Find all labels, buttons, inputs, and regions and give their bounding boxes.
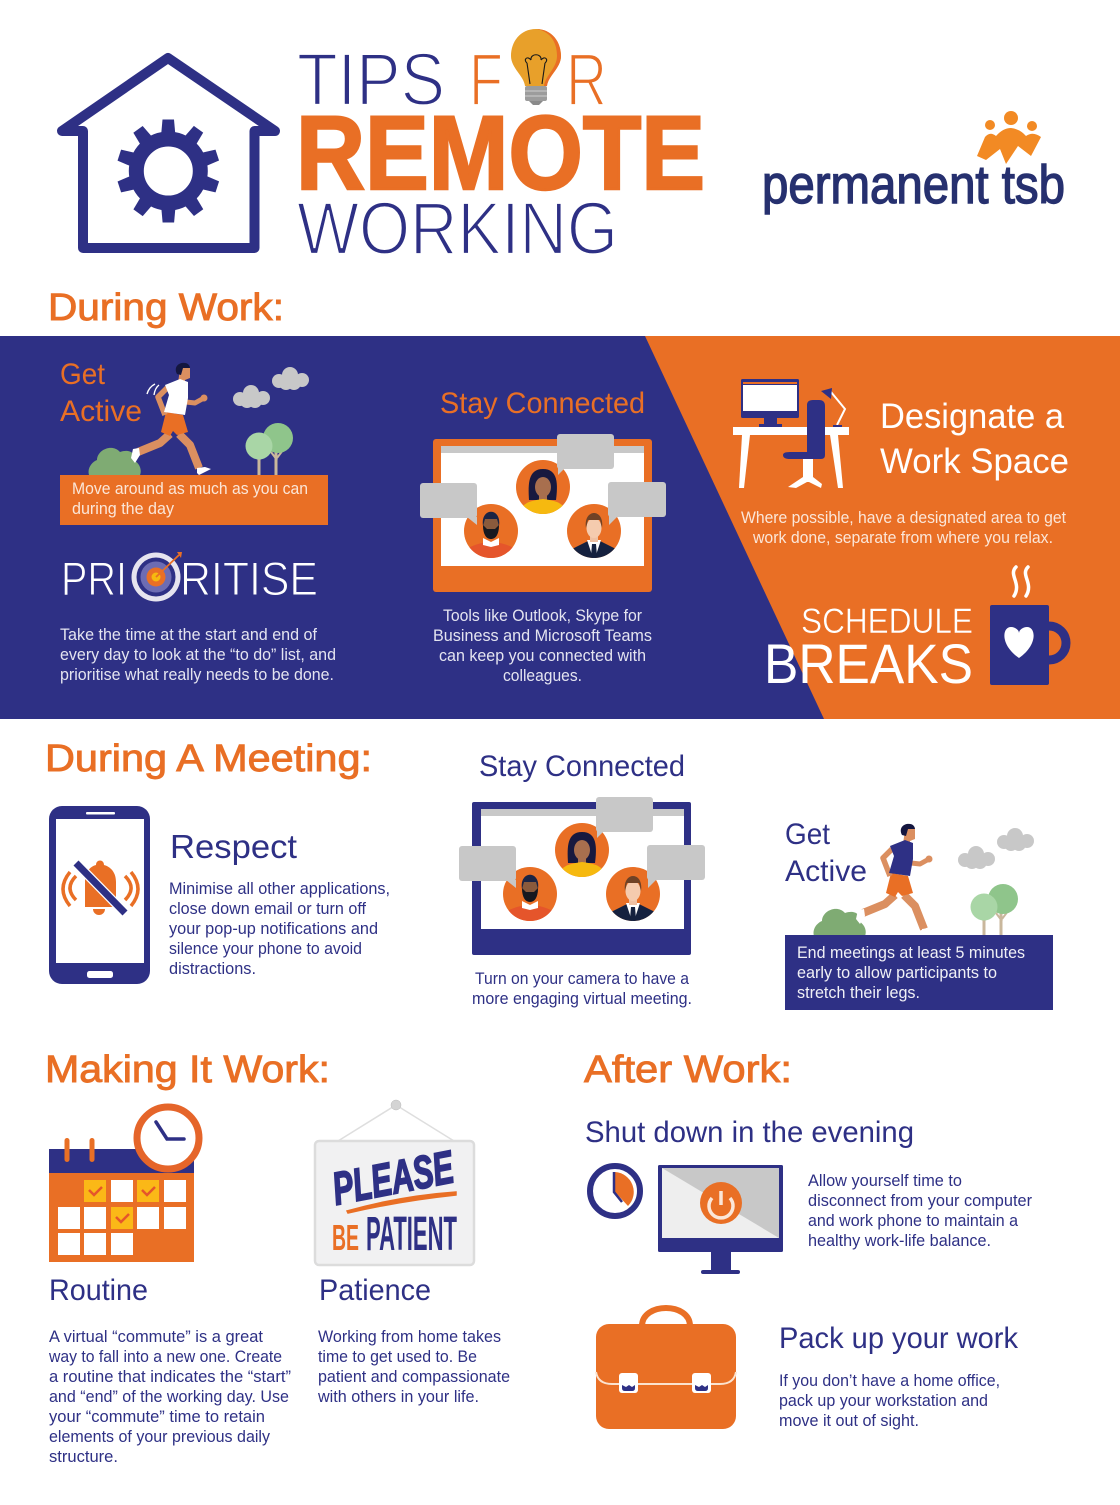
icon: house with gear xyxy=(62,58,275,248)
title line: F: F xyxy=(469,38,503,121)
heading: routine: Routine xyxy=(49,1274,148,1307)
text block: stay connected: colleagues. xyxy=(503,667,582,685)
title line: working: WORKING xyxy=(297,187,618,270)
title line: tips: TIPS xyxy=(297,38,445,121)
text block: designate xyxy=(741,509,1066,547)
heading: get active meeting: Get xyxy=(785,818,831,851)
text block: routine: and “end” of the working day. Use xyxy=(49,1388,289,1406)
logo: permanent tsb xyxy=(762,111,1065,215)
heading: stay connected meeting: Stay Connected xyxy=(479,750,685,783)
icon: silenced phone xyxy=(49,806,150,984)
text block: shut down: Allow yourself time to xyxy=(808,1172,962,1190)
callout: end meetings: End meetings at least 5 minutes xyxy=(797,944,1025,962)
illustration: runner xyxy=(89,363,309,475)
text block: shut down: and work phone to maintain a xyxy=(808,1212,1019,1230)
callout: end meetings: stretch their legs. xyxy=(797,984,920,1002)
heading: designate a work space: Work Space xyxy=(880,442,1069,481)
heading: designate a work space xyxy=(880,397,1069,481)
text block: pack up: pack up your workstation and xyxy=(779,1392,988,1410)
text block: respect: your pop-up notifications and xyxy=(169,920,378,938)
text block: patience: Working from home takes xyxy=(318,1328,501,1346)
text block: routine: way to fall into a new one. Create xyxy=(48,1348,282,1366)
text block: respect: Minimise all other applications, xyxy=(169,880,390,898)
text block: prioritise: every day to look at the “to do” list, and xyxy=(60,646,336,664)
text block: patience: patient and compassionate xyxy=(318,1368,510,1386)
illustration: video call screen xyxy=(420,434,666,592)
heading: get active: Get xyxy=(60,358,106,391)
icon: please be patient sign: PLEASE xyxy=(328,1140,459,1215)
logo: permanent tsb: permanent tsb xyxy=(762,155,1065,215)
icon: desk and chair xyxy=(733,379,849,488)
text block: routine: A virtual “commute” is a great xyxy=(49,1328,263,1346)
text block: prioritise: prioritise what really needs to be done. xyxy=(60,666,334,684)
text block: pack up: If you don’t have a home office, xyxy=(779,1372,1000,1390)
heading: making it work: Making It Work: xyxy=(45,1049,330,1091)
text block: designate: Where possible, have a designated area to get xyxy=(741,509,1066,527)
heading: get active meeting: Active xyxy=(785,855,867,888)
illustration: runner meeting xyxy=(814,824,1034,936)
title line: R: R xyxy=(566,38,607,121)
heading: patience: Patience xyxy=(319,1274,431,1307)
text block: shut down: disconnect from your computer xyxy=(808,1192,1032,1210)
text block: camera: more engaging virtual meeting. xyxy=(472,990,692,1008)
text block: shut down: healthy work-life balance. xyxy=(808,1232,991,1250)
text block: routine: elements of your previous daily xyxy=(49,1428,271,1446)
heading: respect: Respect xyxy=(170,828,297,865)
text block: routine: structure. xyxy=(49,1448,118,1466)
text block: designate: work done, separate from where you relax. xyxy=(752,529,1053,547)
text block: routine xyxy=(48,1328,291,1466)
heading: prioritise: RITISE xyxy=(180,552,318,605)
heading: after work: After Work: xyxy=(584,1049,792,1091)
heading: designate a work space: Designate a xyxy=(880,397,1065,436)
text block: camera xyxy=(472,970,692,1008)
icon: evening clock xyxy=(590,1166,640,1216)
text block: stay connected xyxy=(433,607,652,685)
text block: pack up xyxy=(779,1372,1000,1430)
icon: light bulb xyxy=(511,29,561,105)
text block: stay connected: can keep you connected with xyxy=(439,647,646,665)
callout: end meetings: early to allow participants to xyxy=(797,964,997,982)
title line: remote: REMOTE xyxy=(296,95,705,212)
text block: routine: a routine that indicates the “start” xyxy=(49,1368,291,1386)
heading: get active xyxy=(60,358,142,428)
title xyxy=(62,29,705,270)
text block: respect: silence your phone to avoid xyxy=(169,940,362,958)
illustration: video call screen meeting xyxy=(459,797,705,955)
heading: during a meeting: During A Meeting: xyxy=(45,738,372,780)
text block: respect: close down email or turn off xyxy=(169,900,366,918)
heading: pack up: Pack up your work xyxy=(779,1322,1019,1355)
icon: briefcase xyxy=(596,1308,736,1429)
text block: stay connected: Tools like Outlook, Skype for xyxy=(443,607,642,625)
heading: during work: During Work: xyxy=(48,287,284,329)
heading: shut down: Shut down in the evening xyxy=(585,1116,914,1149)
text block: patience: time to get used to. Be xyxy=(318,1348,477,1366)
text block: patience: with others in your life. xyxy=(317,1388,479,1406)
callout: move around: during the day xyxy=(72,500,175,518)
heading: schedule breaks: SCHEDULE xyxy=(801,602,973,641)
heading: get active: Active xyxy=(60,395,142,428)
text block: camera: Turn on your camera to have a xyxy=(475,970,690,988)
callout: end meetings xyxy=(785,935,1053,1010)
heading: stay connected: Stay Connected xyxy=(440,387,645,420)
heading: schedule breaks: BREAKS xyxy=(764,632,973,695)
text block: respect xyxy=(169,880,390,978)
text block: prioritise xyxy=(60,626,336,684)
heading: schedule breaks xyxy=(764,602,973,695)
text block: stay connected: Business and Microsoft Teams xyxy=(433,627,652,645)
icon: calendar and clock xyxy=(49,1107,199,1262)
icon: please be patient sign: PATIENT xyxy=(366,1208,457,1261)
callout: move around xyxy=(60,475,328,525)
icon: please be patient sign: BE xyxy=(332,1217,359,1258)
callout: move around: Move around as much as you can xyxy=(72,480,308,498)
icon: please be patient sign xyxy=(315,1100,474,1265)
panel: during work band xyxy=(0,336,1120,719)
text block: prioritise: Take the time at the start and end of xyxy=(60,626,317,644)
icon: monitor with power button xyxy=(658,1165,783,1274)
text block: patience xyxy=(317,1328,510,1406)
heading: prioritise xyxy=(61,552,318,605)
text block: shut down xyxy=(808,1172,1032,1250)
heading: get active meeting xyxy=(785,818,867,888)
text block: respect: distractions. xyxy=(169,960,256,978)
text block: routine: your “commute” time to retain xyxy=(49,1408,265,1426)
icon: coffee mug xyxy=(990,567,1066,685)
heading: prioritise: PRI xyxy=(61,552,127,605)
text block: pack up: move it out of sight. xyxy=(779,1412,919,1430)
